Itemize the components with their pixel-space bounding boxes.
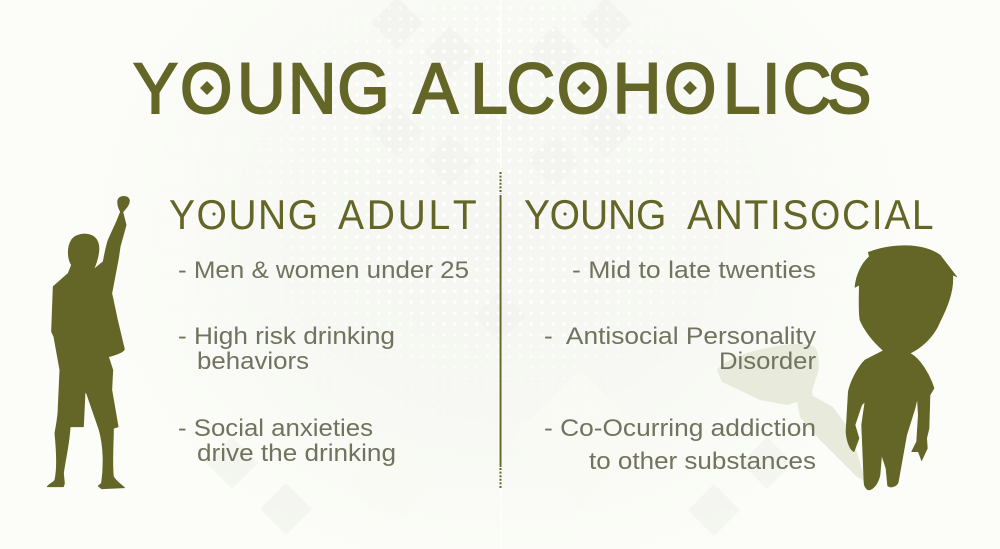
right list: Disorder bbox=[719, 348, 816, 375]
background bbox=[372, 0, 632, 341]
right list: to other substances bbox=[589, 448, 816, 475]
left list: - Social anxieties bbox=[178, 415, 373, 442]
left list: behaviors bbox=[197, 348, 309, 375]
left list: drive the drinking bbox=[197, 440, 396, 467]
left list: - Men & women under 25 bbox=[178, 257, 469, 284]
left list bbox=[178, 257, 469, 467]
icon: young adult silhouette with raised fist bbox=[47, 196, 129, 489]
right list bbox=[544, 257, 817, 475]
icon: young antisocial boy silhouette bbox=[846, 246, 957, 490]
right list: - Co-Ocurring addiction bbox=[544, 415, 816, 442]
icon: title O diamonds bbox=[200, 81, 697, 95]
title: YOUNG ALCOHOLICS bbox=[133, 48, 871, 128]
right list: - Antisocial Personality bbox=[544, 323, 817, 350]
left list: - High risk drinking bbox=[178, 323, 395, 350]
right list: - Mid to late twenties bbox=[572, 257, 816, 284]
shadow of boy figure bbox=[717, 344, 866, 482]
heading: young antisocial: YOUNG ANTISOCIAL bbox=[524, 191, 934, 238]
divider bbox=[500, 172, 502, 489]
heading: young adult: YOUNG ADULT bbox=[169, 191, 477, 238]
